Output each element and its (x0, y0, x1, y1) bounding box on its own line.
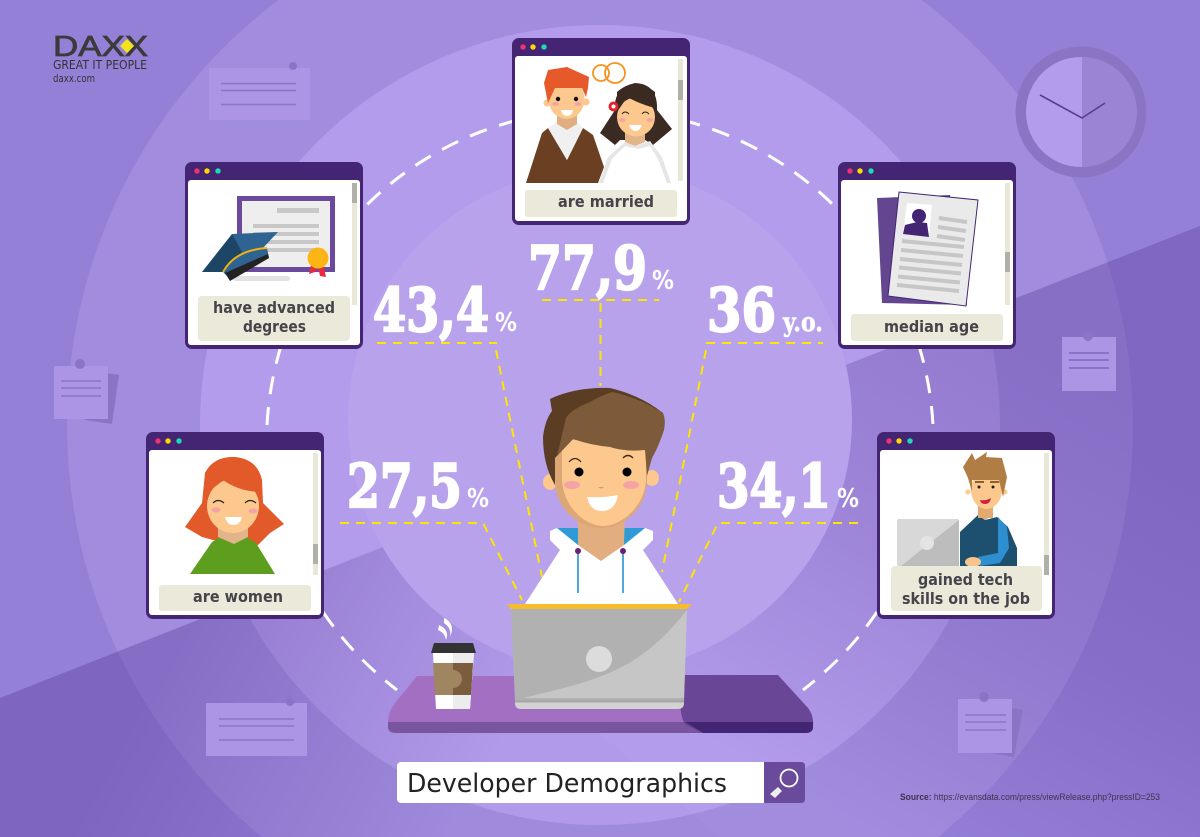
stat: 27,5%: % (467, 484, 489, 514)
logo: DAXX (53, 31, 148, 63)
stat: 43,4%: 43,4 (373, 276, 489, 346)
label: are married (558, 192, 654, 211)
icon: wall clock (1016, 46, 1146, 178)
search bar title (397, 762, 805, 803)
logo: daxx.com (53, 73, 95, 85)
icon: magnifier (770, 770, 798, 798)
sticky note: right (1062, 331, 1116, 391)
panel: have advanced degrees (185, 162, 363, 349)
stat: 77,9%: % (652, 266, 674, 296)
icon: resume sheets (877, 192, 978, 306)
panel: are women (146, 432, 324, 619)
sticky note: top left (209, 62, 310, 120)
label: gained tech (918, 570, 1013, 589)
illustration: woman (185, 457, 284, 574)
dashed circle connector (267, 110, 933, 690)
label: median age (884, 317, 979, 336)
panel: median age (838, 162, 1016, 349)
label: skills on the job (902, 589, 1030, 608)
illustration: married couple (526, 63, 672, 183)
stat: 77,9%: 77,9 (528, 234, 647, 304)
logo (53, 31, 148, 85)
search bar title: Developer Demographics (407, 769, 727, 799)
icon: diploma and graduation cap (202, 196, 335, 281)
label: degrees (243, 317, 306, 336)
sticky note: left (54, 359, 119, 424)
coffee cup (431, 618, 476, 709)
panel: gained tech skills on the job (877, 432, 1055, 619)
illustration: man at laptop (897, 452, 1017, 568)
sticky note: bottom left (206, 698, 307, 756)
label: have advanced (213, 298, 335, 317)
sticky note: bottom right (958, 692, 1023, 757)
stat: 36 y.o.: 36 (707, 276, 776, 346)
stat: 36 y.o.: y.o. (782, 308, 823, 338)
laptop (507, 604, 692, 709)
yellow dashed leader lines (340, 300, 858, 602)
panel: are married (512, 38, 690, 225)
desk (388, 675, 813, 733)
stat: 34,1%: 34,1 (717, 452, 831, 522)
label: are women (193, 587, 283, 606)
source: Source: https://evansdata.com/press/viewRelease.php?pressID=253 (900, 792, 1160, 803)
logo: GREAT IT PEOPLE (53, 57, 147, 72)
stat: 27,5%: 27,5 (347, 452, 462, 522)
stat: 43,4%: % (495, 308, 517, 338)
stat: 34,1%: % (837, 484, 859, 514)
illustration: developer (525, 388, 678, 604)
